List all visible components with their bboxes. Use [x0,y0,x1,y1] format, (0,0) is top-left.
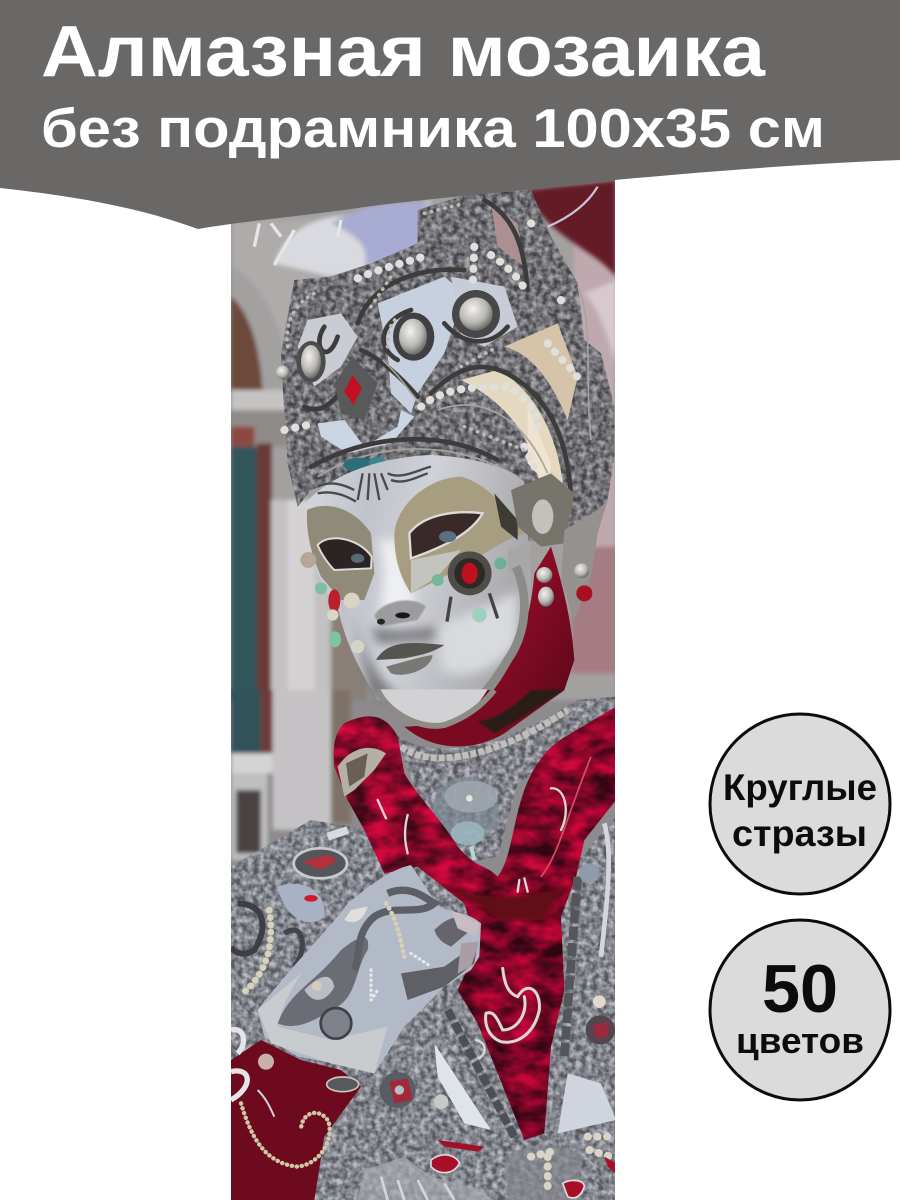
feather strands [254,187,598,265]
crown base [281,190,614,543]
badge: round rhinestones [710,714,890,894]
brooch on scarf [338,748,386,797]
badge: 50 colours: 50 [762,951,838,1027]
mask chin [378,689,494,726]
badge: 50 colours [710,920,890,1100]
mask face [308,455,531,700]
crown scroll lines [304,200,571,497]
shoulder embroidery [231,830,348,995]
white glove cuff and hand [258,865,481,1073]
mask silver trim [478,567,524,700]
eye right [409,512,483,558]
blurred building background [231,180,616,700]
title [41,12,825,159]
red velvet scarf [334,707,616,1140]
forehead ornaments [318,467,431,502]
photo upper part: mask and crown [231,180,616,700]
front costume panel [380,1010,514,1137]
crown panels [378,277,464,413]
costume embroidery texture [231,817,616,1200]
header banner [0,0,900,229]
badge: 50 colours: цветов [736,1020,864,1061]
right costume panel [558,823,616,1133]
feathers [274,180,616,367]
nose shadow [374,600,426,627]
eye left [318,538,372,570]
bottom embroidered band [358,1137,616,1200]
hood under the chin [404,690,564,746]
sleeve lower left, red velvet [231,1030,361,1200]
photo lower part: velvet scarf and embroidered costume [231,689,616,1200]
crown teal gem [343,457,386,472]
red hood [494,546,574,690]
crown silver gems [276,290,500,382]
scarf bead embroidery [378,788,566,1058]
side ornament and earrings [511,473,608,620]
necklace and chest embroidery [394,697,616,863]
gold eye panel right [394,477,524,593]
cheek brooch with red gem [432,546,521,622]
crown pearl strings [284,223,581,467]
photo: Venetian carnival mask costume [231,170,616,1200]
badge: round rhinestones: Круглые [723,767,877,808]
subtitle: без подрамника 100х35 см [41,97,825,159]
lips [376,643,444,675]
badge: round rhinestones: стразы [732,813,867,854]
title: Алмазная мозаика [41,12,766,92]
face shading [351,540,518,700]
blurred lower background [231,690,351,860]
left cheek jewels [300,552,364,653]
velvet fold shading [334,707,616,1140]
crown red jewel [334,357,378,420]
gold eye panel left [307,506,374,600]
crown lace texture [281,190,614,543]
costume silver base [241,820,352,861]
